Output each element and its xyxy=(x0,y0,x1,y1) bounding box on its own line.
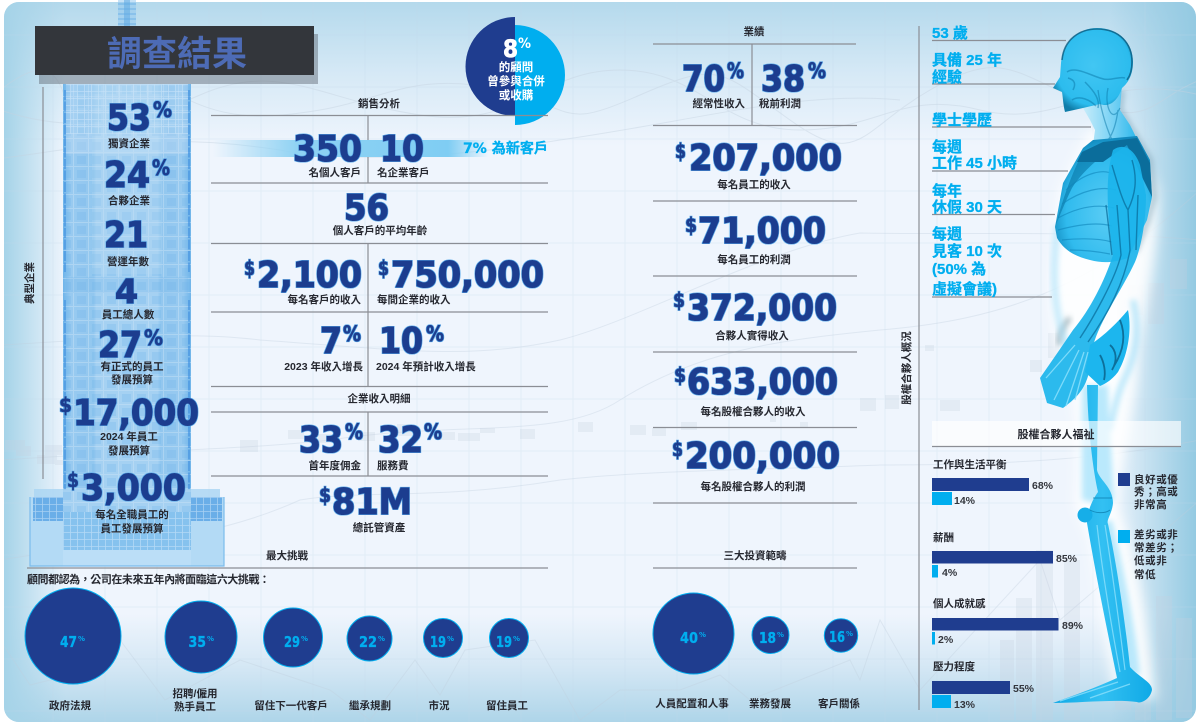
vacation: 休假 30 天 xyxy=(932,198,1002,216)
partner take-home xyxy=(673,288,837,342)
bubble: 40% xyxy=(653,593,734,710)
revenue per client / per firm: 750,000 xyxy=(391,255,544,296)
pie callout: 8% M&A: 曾參與合併 xyxy=(487,74,545,88)
revenue per employee: 每名員工的收入 xyxy=(717,178,791,191)
bubble: 29% xyxy=(254,608,328,712)
challenges intro: 顧問都認為，公司在未來五年內將面臨這六大挑戰： xyxy=(27,572,270,586)
client meetings: (50% 為 xyxy=(932,260,986,278)
bubble: 19% staff: 19 xyxy=(496,633,512,651)
bubble: 19% market: 19 xyxy=(430,633,446,651)
revenue per equity partner xyxy=(674,362,838,418)
revenue growth: % xyxy=(426,322,444,346)
bubble: 19% staff: 留住員工 xyxy=(486,699,528,712)
pie callout: 8% M&A: 或收購 xyxy=(499,88,534,102)
pelvis xyxy=(1085,310,1130,386)
arm and hand xyxy=(1040,147,1146,408)
body glow xyxy=(1051,90,1158,700)
stat: $17,000: 2024 年員工 xyxy=(100,430,158,443)
panel: sales analysis xyxy=(211,97,549,534)
panel: performance xyxy=(653,25,857,503)
chart: work-life balance: 14% xyxy=(954,495,976,507)
average age: 56 xyxy=(344,188,389,229)
revenue split: 32 xyxy=(378,420,423,461)
stat: $17,000: $ xyxy=(59,393,72,417)
assets under management xyxy=(319,482,412,534)
pie callout: 8% M&A: % xyxy=(518,36,531,52)
right vertical rule and side label: 股權合夥人概況 xyxy=(900,331,913,405)
revenue per client / per firm xyxy=(244,255,544,306)
bubble: 16%: 客戶關係 xyxy=(818,697,860,710)
stat: $17,000 xyxy=(59,393,199,457)
bubble: 18%: % xyxy=(777,631,784,639)
heading: sales analysis: 銷售分析 xyxy=(358,97,400,110)
work hours: 工作 45 小時 xyxy=(932,155,1017,172)
vacation xyxy=(932,182,1002,216)
legend xyxy=(1118,473,1178,581)
typical firm stats xyxy=(59,98,199,535)
well-being header xyxy=(932,421,1181,446)
revenue split: 服務費 xyxy=(377,459,408,472)
revenue per client / per firm: $ xyxy=(244,256,255,280)
bubble: 35%: 熟手員工 xyxy=(174,700,216,713)
profit per equity partner xyxy=(672,436,840,493)
bubble: 22%: % xyxy=(378,635,385,643)
heading: biggest challenges: 最大挑戰 xyxy=(266,549,308,562)
section rules xyxy=(211,115,548,476)
revenue growth xyxy=(284,321,476,373)
chart: personal fulfilment: 2% xyxy=(938,634,954,646)
client meetings: 虛擬會議) xyxy=(932,280,997,298)
partner take-home: 372,000 xyxy=(687,288,837,329)
work hours xyxy=(932,138,1017,172)
bubble: 19% staff xyxy=(486,618,528,712)
education: 學士學歷 xyxy=(932,111,992,129)
revenue growth: 10 xyxy=(379,321,423,362)
client counts: 名企業客戶 xyxy=(377,166,430,179)
stat: 53%: % xyxy=(153,98,172,122)
stat: 4: 員工總人數 xyxy=(102,308,155,321)
legend: negative: 差劣或非 xyxy=(1134,528,1178,541)
panel: biggest challenges xyxy=(25,549,548,713)
chart: compensation xyxy=(932,531,1078,579)
bubble: 16% xyxy=(818,619,860,710)
legend: positive xyxy=(1118,473,1178,511)
assets under management: $ xyxy=(319,483,331,507)
profit per employee: 每名員工的利潤 xyxy=(717,253,791,266)
legend: positive: 良好或優 xyxy=(1134,473,1178,486)
bubble: 47%: 47 xyxy=(60,633,77,651)
client counts xyxy=(293,129,548,179)
stat: 24% xyxy=(104,155,170,207)
stat: $17,000: 發展預算 xyxy=(108,444,150,457)
chart: stress level: 13% xyxy=(954,699,976,711)
revenue per equity partner: 633,000 xyxy=(687,362,838,403)
legend: negative: 低或非 xyxy=(1134,554,1167,567)
revenue per employee: 207,000 xyxy=(689,138,842,179)
revenue per equity partner: 每名股權合夥人的收入 xyxy=(700,405,806,418)
revenue growth: % xyxy=(343,322,361,346)
client meetings: 每週 xyxy=(932,225,962,243)
average age xyxy=(333,188,428,237)
bubble: 40%: 40 xyxy=(680,629,698,647)
tower illustration xyxy=(30,0,224,566)
chart: work-life balance: 68% xyxy=(1032,480,1054,492)
stat: $17,000: 17,000 xyxy=(73,393,199,434)
partner take-home: 合夥人實得收入 xyxy=(715,329,789,342)
revenue split: 首年度佣金 xyxy=(308,459,361,472)
revenue per client / per firm: $ xyxy=(378,256,389,280)
recurring revenue and pre-tax profit xyxy=(682,59,826,110)
bubble: 22%: 22 xyxy=(359,633,377,651)
stat: 27%: 27 xyxy=(98,325,142,366)
partner take-home: $ xyxy=(673,288,685,312)
bubble: 47% xyxy=(25,588,121,712)
legend: negative: 常差劣； xyxy=(1134,541,1178,554)
chart: compensation: 4% xyxy=(942,567,958,579)
stat: 53%: 獨資企業 xyxy=(108,137,150,150)
revenue per client / per firm: 2,100 xyxy=(257,255,362,296)
tower base xyxy=(30,489,224,566)
recurring revenue and pre-tax profit: 38 xyxy=(761,59,805,100)
revenue per employee xyxy=(675,138,842,191)
profit per employee xyxy=(685,211,826,266)
chart: stress level: 55% xyxy=(1013,683,1035,695)
stat: $3,000: 員工發展預算 xyxy=(100,522,164,535)
chart: compensation: 薪酬 xyxy=(933,531,954,544)
stat: 4 xyxy=(102,272,155,321)
bubble: 35%: 35 xyxy=(188,633,206,651)
torso and ribs xyxy=(1055,136,1152,262)
client counts: 350 xyxy=(293,129,362,170)
title text: 調查結果 xyxy=(107,35,247,74)
stat: 53% xyxy=(107,98,172,150)
stat: 24%: % xyxy=(152,156,170,180)
bubble: 19% market: 市況 xyxy=(428,699,450,712)
recurring revenue and pre-tax profit: 稅前利潤 xyxy=(759,97,801,110)
client counts: 7% 為新客戶 xyxy=(463,140,548,157)
stat: 4: 4 xyxy=(115,272,138,311)
bubble: 18%: 業務發展 xyxy=(749,697,791,710)
neck xyxy=(1083,85,1140,145)
experience: 具備 25 年 xyxy=(932,51,1002,69)
bubble: 40%: 人員配置和人事 xyxy=(655,697,729,710)
pie callout: 8% M&A: 8 xyxy=(503,35,518,63)
bubble: 19% market xyxy=(424,618,462,712)
average age: 個人客戶的平均年齡 xyxy=(333,224,428,237)
assets under management: 81M xyxy=(332,482,412,523)
stat: 21: 21 xyxy=(104,215,148,256)
revenue split xyxy=(299,420,442,472)
bubble: 40%: % xyxy=(699,631,706,639)
experience xyxy=(932,51,1002,86)
bubble: 19% market: % xyxy=(447,635,454,643)
age: 53 歲 xyxy=(932,24,968,42)
bubble: 35% xyxy=(165,601,237,713)
client counts: 名個人客戶 xyxy=(308,166,361,179)
revenue split: % xyxy=(424,420,442,444)
well-being header: 股權合夥人福祉 xyxy=(1018,427,1094,441)
stat: 27%: % xyxy=(144,326,163,350)
stat: 27% xyxy=(98,325,164,386)
leg bones xyxy=(1053,385,1152,703)
bubble: 35%: 招聘/僱用 xyxy=(173,687,217,700)
bubble: 29%: 留住下一代客戶 xyxy=(254,699,328,712)
revenue split: 33 xyxy=(299,420,343,461)
bubble: 16%: % xyxy=(846,630,853,638)
client meetings xyxy=(932,225,1002,298)
pie callout: 8% M&A xyxy=(466,17,565,125)
bubble: 22% xyxy=(347,616,392,712)
stat: 24%: 24 xyxy=(104,155,150,196)
recurring revenue and pre-tax profit: % xyxy=(727,59,744,83)
chart: stress level: 壓力程度 xyxy=(933,660,975,673)
body skeleton illustration xyxy=(1040,28,1158,703)
chart: personal fulfilment xyxy=(932,597,1084,646)
recurring revenue and pre-tax profit: 70 xyxy=(682,59,725,100)
panel: top investment areas xyxy=(653,549,860,710)
revenue growth: 2024 年預計收入增長 xyxy=(376,360,476,373)
chart: work-life balance xyxy=(932,458,1054,507)
revenue per equity partner: $ xyxy=(674,363,686,387)
client counts: 10 xyxy=(380,129,424,170)
pie callout: 8% M&A: 的顧問 xyxy=(499,60,533,74)
chart: compensation: 85% xyxy=(1056,553,1078,565)
bubble: 19% staff: % xyxy=(513,635,520,643)
revenue growth: 7 xyxy=(320,321,342,362)
stat: $3,000 xyxy=(67,468,186,535)
stat lines xyxy=(932,40,1091,297)
tower shaft xyxy=(63,84,191,490)
bubble: 29%: 29 xyxy=(284,633,300,651)
profit per equity partner: 200,000 xyxy=(685,436,840,477)
assets under management: 總託管資產 xyxy=(353,521,406,534)
panel: equity partner profile xyxy=(900,24,1091,710)
recurring revenue and pre-tax profit: 經常性收入 xyxy=(692,97,745,110)
revenue growth: 2023 年收入增長 xyxy=(284,360,363,373)
legend: positive: 秀；高或 xyxy=(1134,485,1178,498)
bubble: 47%: % xyxy=(78,635,85,643)
stat: $3,000: 每名全職員工的 xyxy=(95,508,169,521)
stat: 27%: 發展預算 xyxy=(111,373,153,386)
left vertical rule and side label: 典型企業 xyxy=(23,262,36,304)
revenue per employee: $ xyxy=(675,139,686,163)
bubble: 47%: 政府法規 xyxy=(49,699,91,712)
legend: positive: 非常高 xyxy=(1134,498,1167,511)
legend: negative: 常低 xyxy=(1134,568,1156,581)
tower spire xyxy=(118,0,136,28)
bubble: 18% xyxy=(749,616,791,710)
revenue per client / per firm: 每間企業的收入 xyxy=(377,293,451,306)
profit per equity partner: 每名股權合夥人的利潤 xyxy=(700,480,806,493)
bubble: 22%: 繼承規劃 xyxy=(349,699,391,712)
work hours: 每週 xyxy=(932,138,962,156)
stat: $3,000: $ xyxy=(67,468,79,492)
profit per equity partner: $ xyxy=(672,437,683,461)
revenue per client / per firm: 每名客戶的收入 xyxy=(288,293,361,306)
stat: $3,000: 3,000 xyxy=(81,468,186,509)
chart: stress level xyxy=(932,660,1035,711)
heading: investment areas: 三大投資範疇 xyxy=(724,549,787,562)
legend: negative xyxy=(1118,528,1178,581)
performance rules xyxy=(653,44,857,503)
title bar xyxy=(35,26,318,84)
revenue split: % xyxy=(345,420,363,444)
stat: 53%: 53 xyxy=(107,98,151,139)
bubble: 35%: % xyxy=(207,635,214,643)
vacation: 每年 xyxy=(932,182,962,200)
panel: equity partner well-being xyxy=(932,421,1181,711)
bubble: 18%: 18 xyxy=(759,629,776,647)
recurring revenue and pre-tax profit: % xyxy=(808,59,826,83)
bubble: 29%: % xyxy=(301,635,308,643)
bubble: 16%: 16 xyxy=(829,628,845,646)
stat: 24%: 合夥企業 xyxy=(108,194,150,207)
chart: personal fulfilment: 個人成就感 xyxy=(933,597,986,610)
stat: 27%: 有正式的員工 xyxy=(100,360,164,373)
chart: work-life balance: 工作與生活平衡 xyxy=(933,458,1007,471)
experience: 經驗 xyxy=(932,68,962,86)
profit per employee: $ xyxy=(685,213,697,237)
new client gradient bar xyxy=(213,140,549,157)
chart: personal fulfilment: 89% xyxy=(1062,620,1084,632)
heading: performance: 業績 xyxy=(744,25,765,38)
profit per employee: 71,000 xyxy=(698,211,826,252)
heading: revenue breakdown: 企業收入明細 xyxy=(348,392,410,405)
head xyxy=(1053,28,1133,140)
client meetings: 見客 10 次 xyxy=(932,242,1002,260)
stat: 21: 營運年數 xyxy=(107,255,149,268)
